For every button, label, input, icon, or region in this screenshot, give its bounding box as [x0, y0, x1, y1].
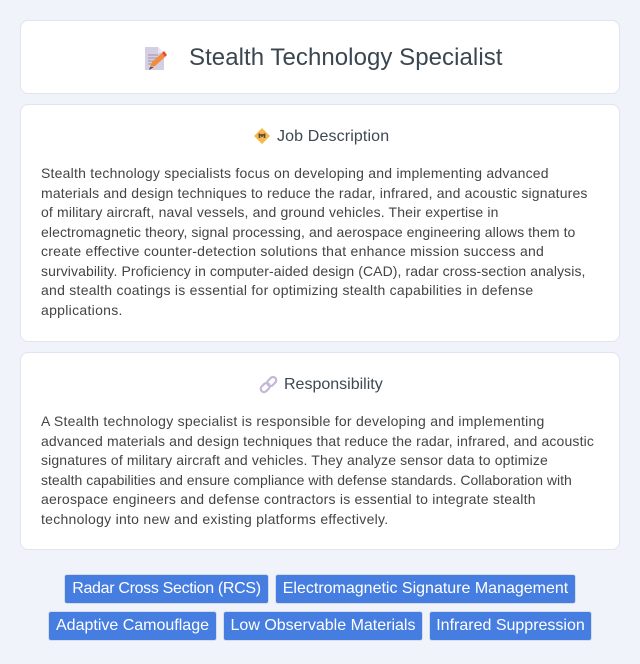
panel: title card: [20, 20, 620, 94]
text: job description: Stealth technology specialists focus on developing and implementing advanced: [41, 165, 549, 181]
tag: adaptive camouflage: Adaptive Camouflage: [56, 617, 209, 634]
icon: diamond sign: [254, 128, 270, 144]
tag: low observable materials: Low Observable Materials: [231, 617, 415, 634]
text: job description: materials and design techniques to reduce the radar, infrared, and acoustic signatures: [41, 184, 588, 200]
text: job description: create effective counter-detection solutions that enhance mission success and: [41, 243, 544, 259]
text: responsibility: A Stealth technology specialist is responsible for developing and implementing: [41, 413, 545, 429]
text: responsibility: aerospace engineers and defense contractors is essential to integrate stealth: [41, 491, 536, 507]
text: responsibility: [41, 413, 594, 527]
panel: job description: [20, 104, 620, 342]
text: job description: electromagnetic theory, signal processing, and aerospace engineering allows them to: [41, 224, 575, 240]
text: job description: and stealth coatings is essential for optimizing stealth capabilities in defense: [41, 282, 533, 298]
heading: responsibility: Responsibility: [284, 376, 383, 393]
panel: responsibility: [20, 352, 620, 550]
text: job description: survivability. Proficiency in computer-aided design (CAD), radar cross-section analysis,: [41, 262, 586, 278]
tag: low observable materials: [223, 611, 423, 641]
tag: electromagnetic signature management: Electromagnetic Signature Management: [283, 580, 568, 597]
tag: infrared suppression: [429, 611, 592, 641]
text: responsibility: signatures of military aircraft and vehicles. They analyze sensor data to optimize: [41, 452, 548, 468]
tag: radar cross section: Radar Cross Section (RCS): [72, 580, 261, 597]
tag: radar cross section: [64, 574, 269, 604]
heading: job description: Job Description: [277, 128, 389, 145]
icon: chain link: [260, 376, 278, 394]
tag: infrared suppression: Infrared Suppression: [436, 617, 585, 634]
tag: electromagnetic signature management: [275, 574, 576, 604]
title: Stealth Technology Specialist: [189, 44, 502, 71]
text: job description: [41, 165, 588, 318]
text: job description: applications.: [41, 302, 123, 318]
text: responsibility: technology into new and existing platforms effectively.: [41, 510, 388, 526]
text: job description: of military aircraft, naval vessels, and ground vehicles. Their expertise in: [41, 204, 499, 220]
tag: adaptive camouflage: [48, 611, 217, 641]
text: responsibility: advanced materials and design techniques that reduce the radar, infrared, and acoustic: [41, 432, 594, 448]
text: responsibility: stealth capabilities and ensure compliance with defense standards. Collaboration with: [41, 472, 572, 488]
icon: document with pencil: [145, 47, 167, 70]
